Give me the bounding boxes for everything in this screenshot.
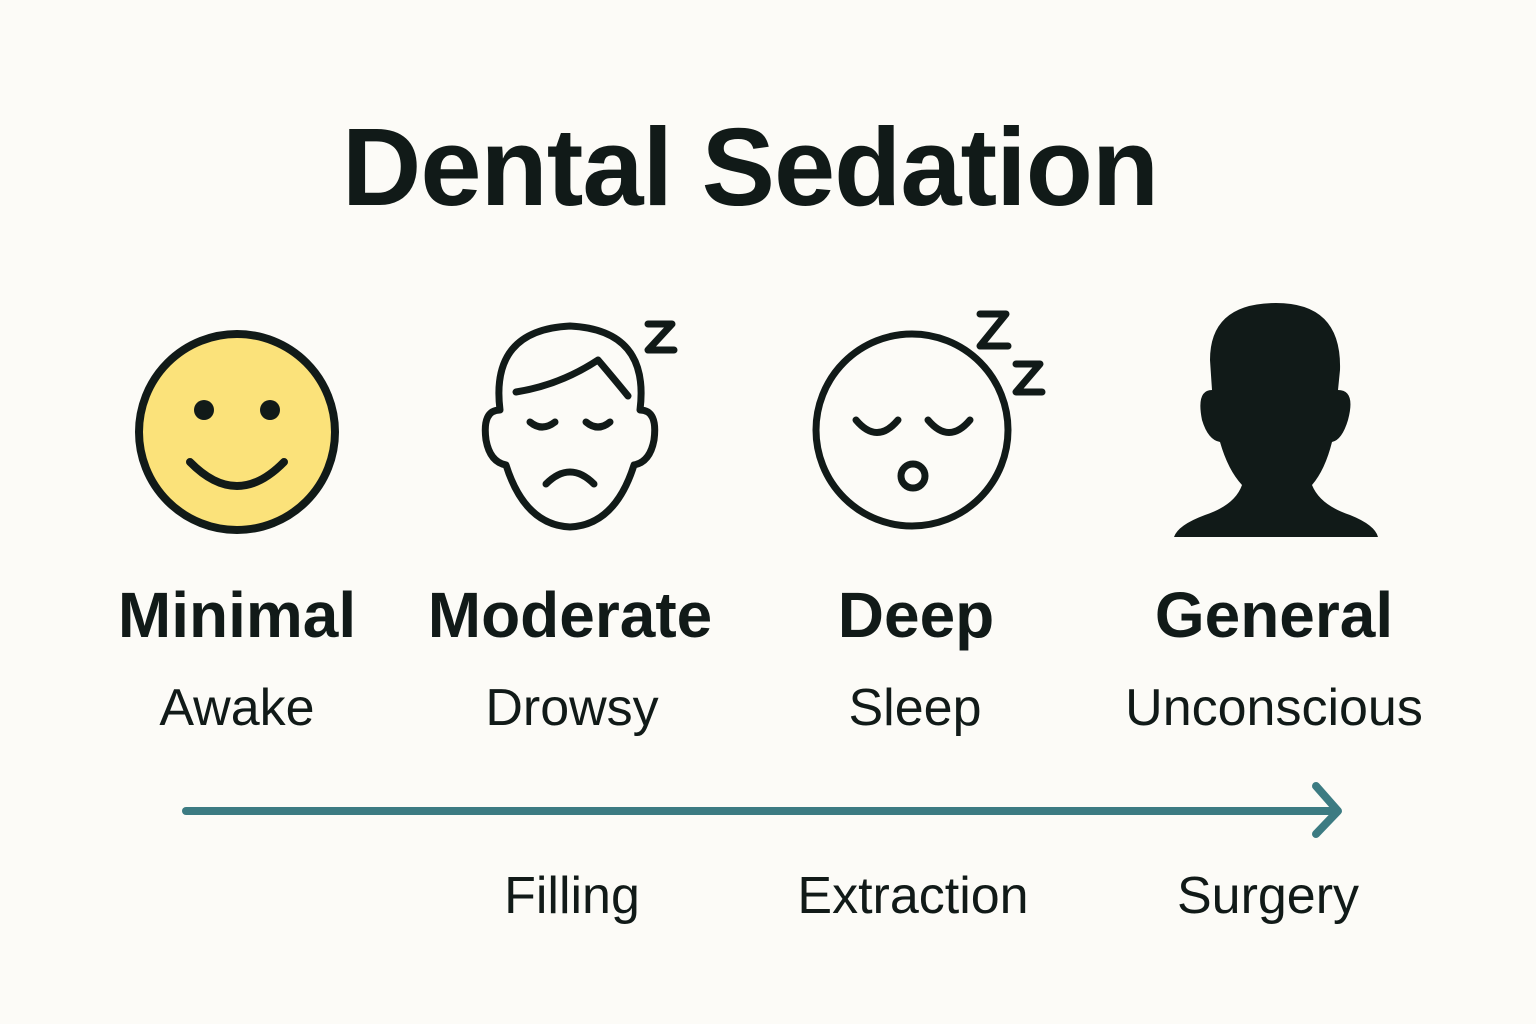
icon: smiley [139, 334, 335, 530]
procedure: extraction: Extraction [797, 867, 1029, 925]
label: moderate: Moderate [428, 579, 712, 651]
icon: drowsy face [485, 324, 674, 527]
icon: sleeping face [816, 314, 1042, 526]
label: general: General [1155, 579, 1393, 651]
label: deep: Deep [838, 579, 994, 651]
label: minimal: Minimal [118, 579, 356, 651]
arrow [186, 786, 1338, 834]
sub: drowsy: Drowsy [485, 679, 659, 737]
sub: sleep: Sleep [848, 679, 982, 737]
procedure: surgery: Surgery [1177, 867, 1359, 925]
sub: awake: Awake [159, 679, 315, 737]
procedure: filling: Filling [504, 867, 640, 925]
title: Dental Sedation [342, 106, 1158, 229]
icon: silhouette [1174, 303, 1378, 537]
sub: unconscious: Unconscious [1125, 679, 1423, 737]
